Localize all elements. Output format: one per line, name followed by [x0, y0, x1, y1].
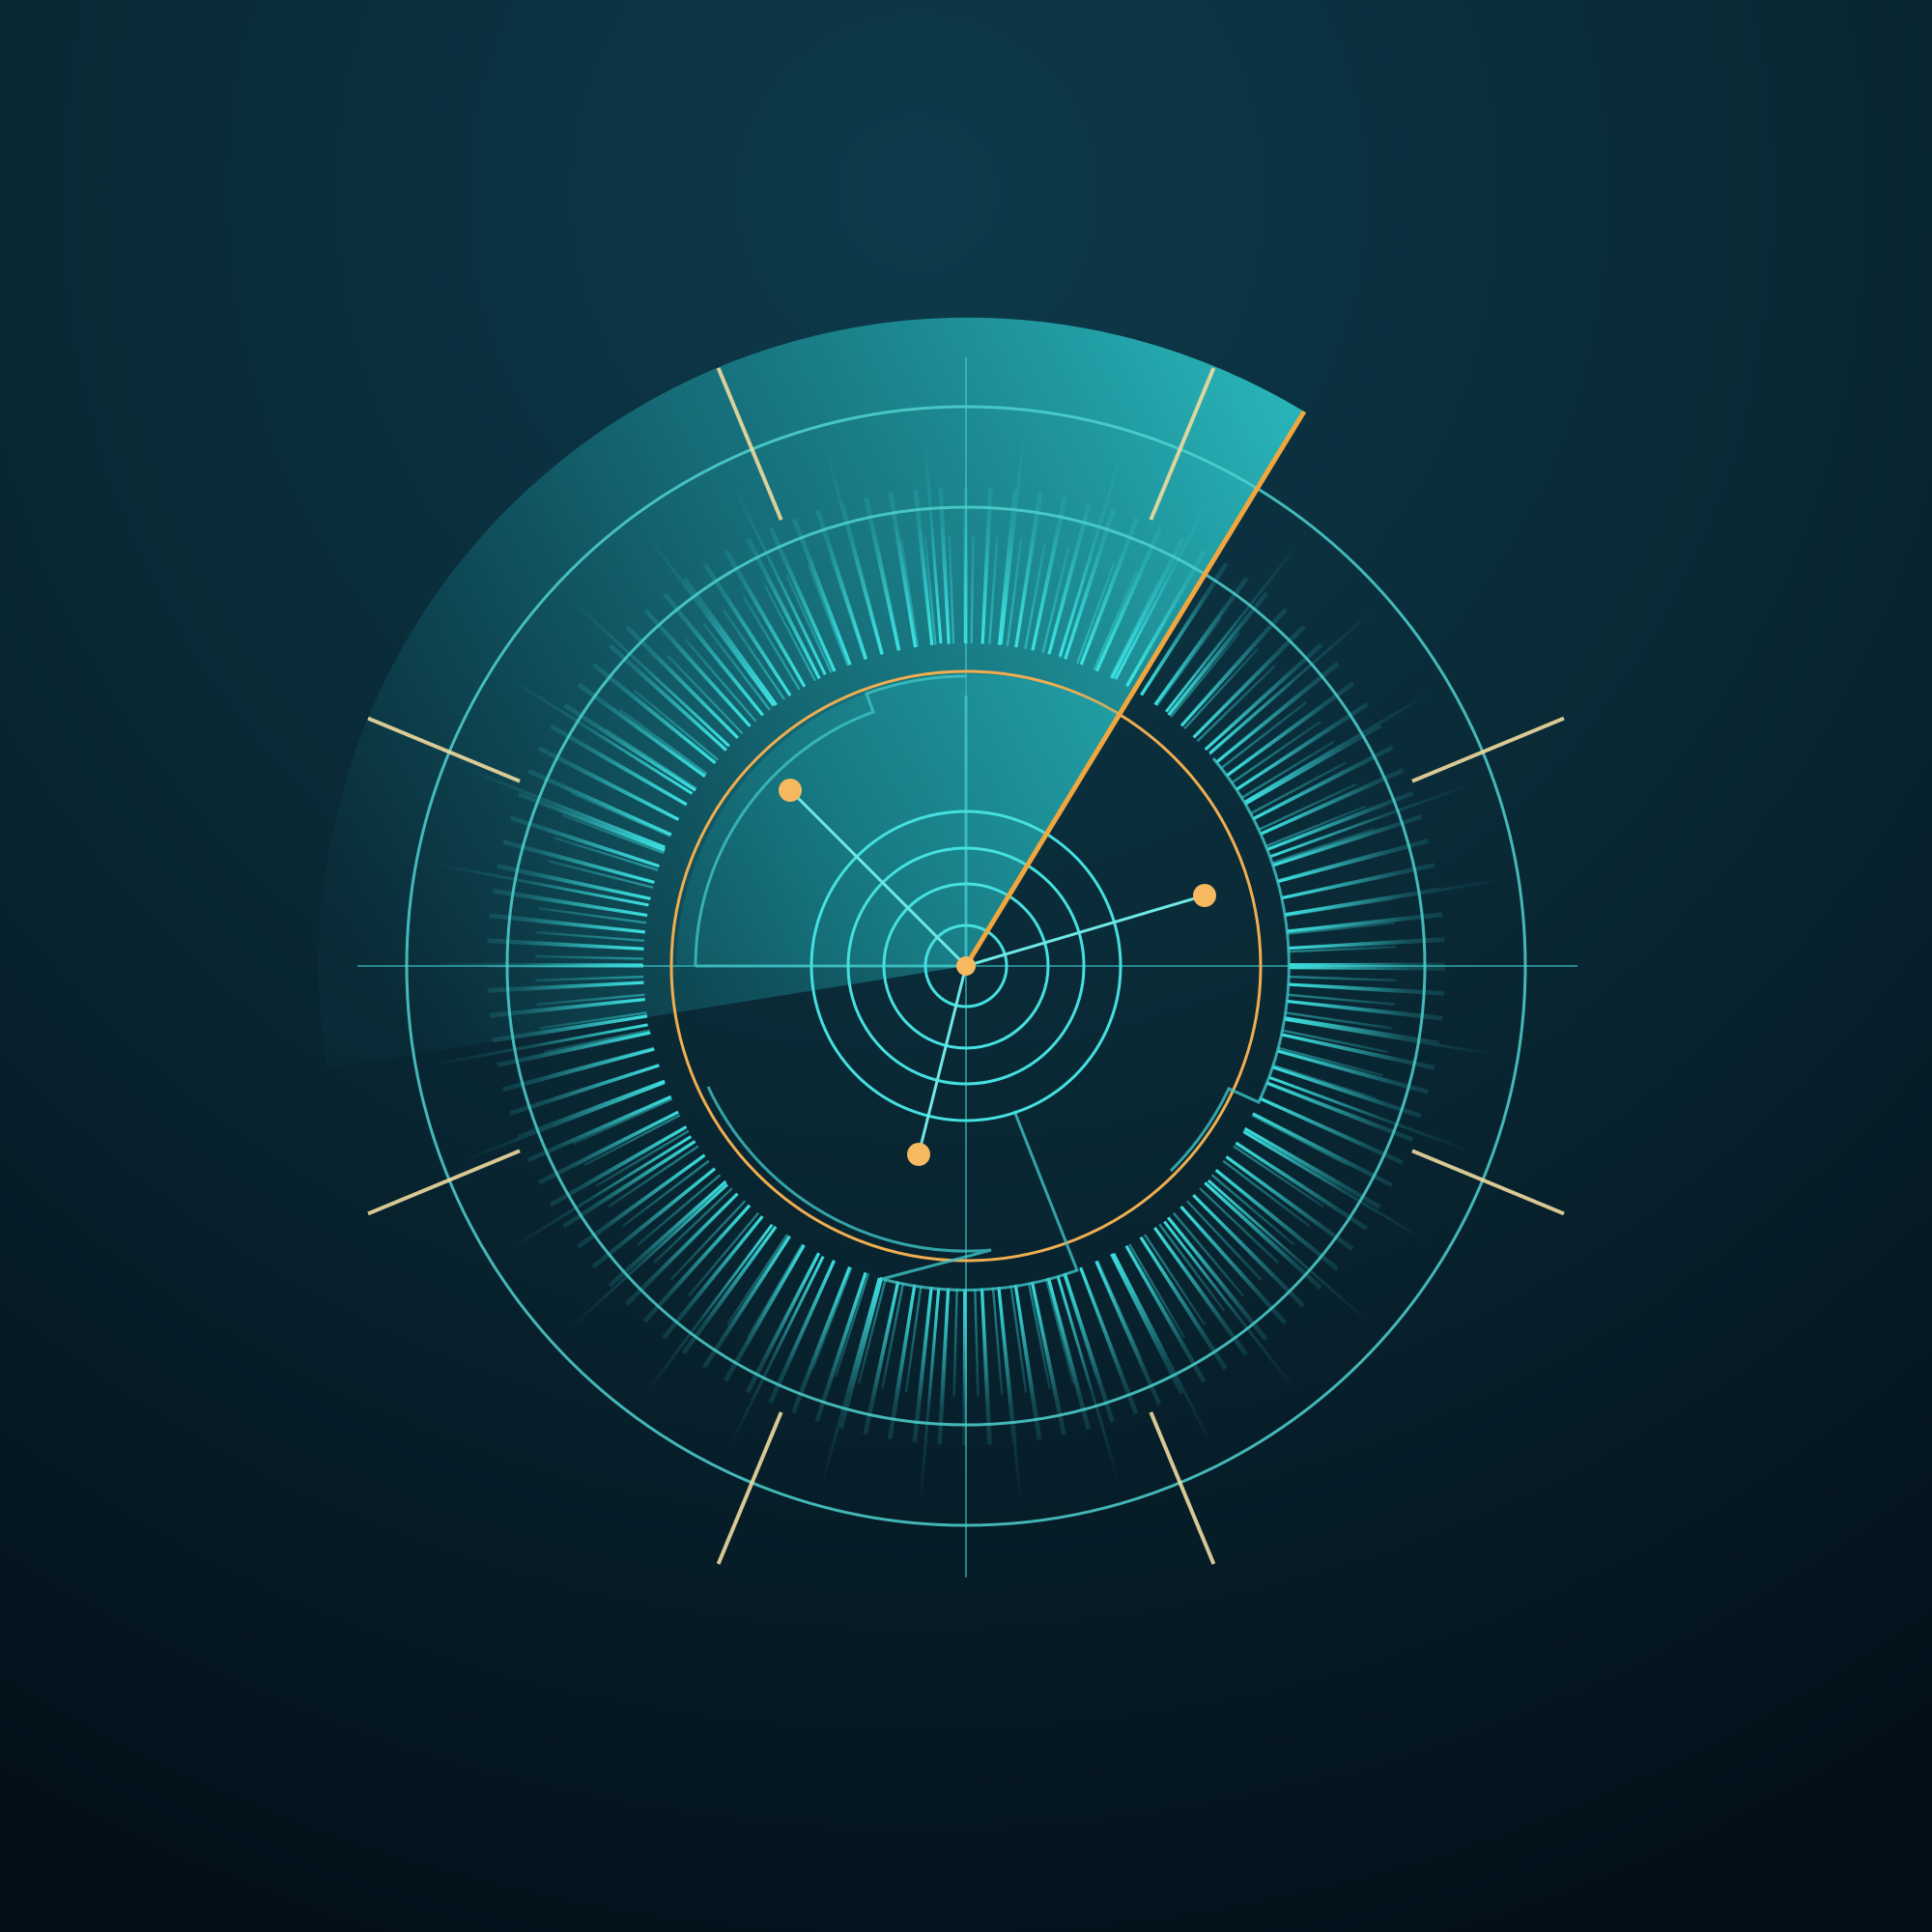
orange sweep line	[966, 412, 1304, 966]
circuit arcs	[696, 676, 1289, 1290]
pale accent lines	[368, 368, 1564, 1564]
orange ring	[671, 671, 1261, 1261]
inner rings	[811, 811, 1121, 1121]
sweep wedge	[319, 318, 1304, 1068]
crosshair lines	[357, 357, 1577, 1577]
inner sweep	[676, 674, 1121, 966]
node links	[790, 790, 1205, 1154]
nodes	[779, 779, 1216, 1166]
outer rings	[407, 407, 1525, 1525]
tick ring	[512, 512, 1420, 1420]
